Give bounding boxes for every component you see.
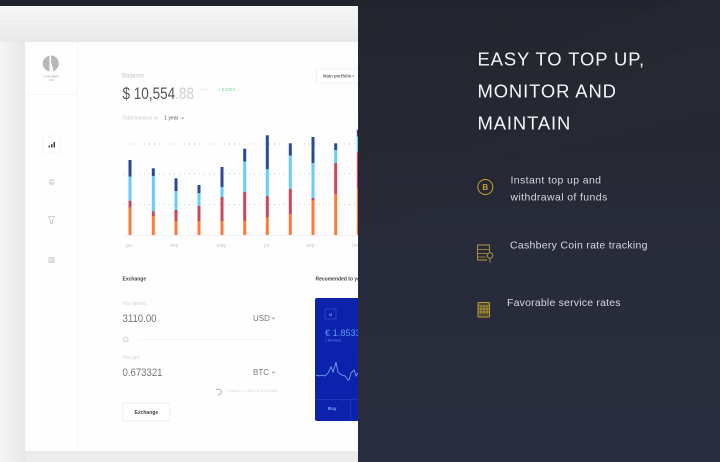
- recommended blue card: [315, 298, 361, 421]
- balance change: [200, 88, 236, 92]
- feature: service rates: [478, 297, 621, 317]
- total balance selector: 1 year: [164, 116, 179, 122]
- recommended heading: Recomended to you: [316, 276, 363, 282]
- buy label: Buy: [328, 406, 337, 411]
- text: Instant top up and: [510, 174, 601, 186]
- recommended blue card: 1 Monero: [325, 338, 341, 342]
- text: withdrawal of funds: [510, 192, 608, 204]
- you spend: You spend:: [122, 301, 147, 307]
- logo: PAY: [49, 78, 54, 82]
- currency badge: [325, 309, 336, 319]
- bar: sep: [312, 137, 314, 235]
- exchange form: 3110.00: [122, 313, 156, 325]
- rate: € 1.8533: [325, 328, 361, 338]
- exchange form: [122, 301, 278, 395]
- balance change: + $ 235.5: [218, 87, 236, 92]
- sidebar icon: settings: [48, 257, 54, 263]
- icon: calculator: [478, 302, 490, 317]
- sparkline: [316, 362, 358, 380]
- heading: MAINTAIN: [478, 112, 571, 134]
- dashboard card: [0, 6, 366, 462]
- card left shade: [0, 42, 25, 462]
- card top shade: [0, 6, 358, 10]
- grid lines: [124, 144, 358, 204]
- sidebar icon: globe: [48, 179, 55, 185]
- month labels: jul: [263, 243, 269, 249]
- month labels: [126, 243, 358, 248]
- app window: [25, 42, 358, 451]
- month labels: nov: [352, 243, 361, 249]
- feature: instant top up: [478, 174, 608, 204]
- sidebar icon: chart active: [43, 136, 60, 153]
- logo: CASHBERY: [43, 74, 60, 78]
- bar: aug: [289, 143, 292, 235]
- bar: oct: [334, 143, 337, 235]
- sidebar separators: [25, 42, 78, 451]
- icon: bitcoin coin: B: [482, 183, 488, 192]
- swap divider: [123, 337, 128, 342]
- text: [510, 174, 608, 204]
- exchange heading: Exchange: [122, 276, 146, 282]
- total balance selector: Total balance in: [122, 116, 158, 122]
- text: Cashbery Coin rate tracking: [510, 240, 648, 252]
- text: Favorable service rates: [507, 297, 621, 309]
- exchange form: 0.673321: [122, 367, 162, 379]
- feature: rate tracking: [478, 240, 648, 262]
- rate note: [216, 389, 221, 395]
- heading: EASY TO TOP UP,: [478, 48, 645, 70]
- portfolio dropdown: Main portfolio: [323, 74, 352, 78]
- bar: jan: [128, 160, 132, 235]
- exchange form: BTC: [253, 368, 269, 377]
- card backdrop: [25, 451, 358, 462]
- exchange form: 1 Bitcoin = 4,893.06 US Dollar: [226, 389, 278, 393]
- month labels: mar: [170, 243, 179, 249]
- exchange button: Exchange: [134, 410, 158, 416]
- heading: [478, 48, 645, 134]
- recommended blue card: M: [329, 313, 332, 317]
- portfolio dropdown: [316, 69, 366, 83]
- icon: ledger with badge: [478, 245, 493, 262]
- balance amount: $ 10,554.88: [122, 84, 194, 103]
- bar: mar: [174, 178, 178, 235]
- exchange form: USD: [253, 314, 270, 323]
- month labels: sep: [306, 243, 315, 249]
- month labels: may: [217, 243, 227, 249]
- you get: You get:: [122, 355, 141, 361]
- total balance selector: [122, 116, 184, 120]
- month labels: jan: [125, 243, 133, 249]
- logo: [43, 56, 60, 82]
- balance label: Balance: [122, 72, 144, 80]
- bar: nov: [357, 130, 358, 235]
- bar: may: [220, 167, 224, 235]
- card divider: [315, 398, 358, 401]
- sidebar icon: filter: [48, 216, 54, 224]
- exchange button: [123, 403, 170, 421]
- heading: MONITOR AND: [478, 80, 617, 102]
- bar: feb: [152, 168, 155, 235]
- bar: jul: [266, 135, 269, 235]
- bar: jun: [243, 149, 246, 235]
- bar: apr: [198, 185, 200, 235]
- bar chart: [124, 130, 361, 249]
